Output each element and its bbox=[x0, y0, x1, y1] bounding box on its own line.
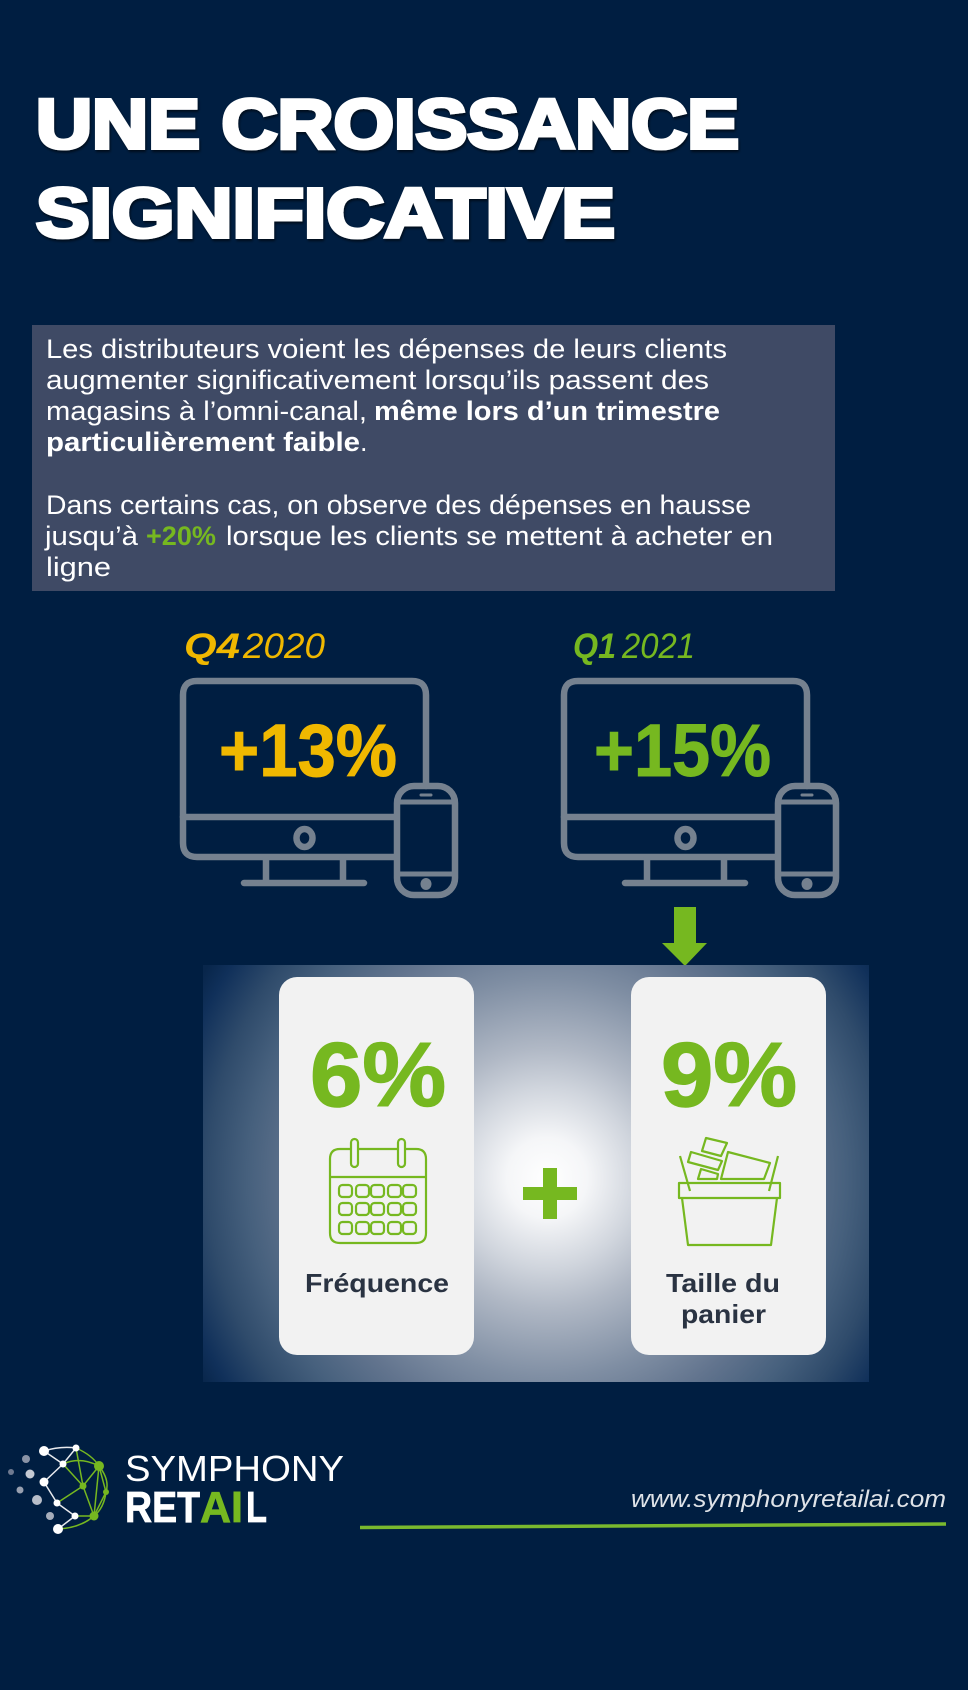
panel: intro text: même lors d’un trimestre bbox=[374, 396, 720, 426]
label: Fréquence: Fréquence bbox=[305, 1268, 449, 1298]
card: basket size bbox=[631, 977, 826, 1355]
heading: Q1 2021: 2021 bbox=[621, 627, 695, 666]
wordmark: RETAIL: L bbox=[246, 1483, 267, 1532]
wordmark: RETAIL: AI bbox=[200, 1483, 243, 1532]
footer line bbox=[360, 1524, 946, 1528]
label: Taille du panier bbox=[666, 1268, 780, 1329]
panel: intro text: ligne bbox=[46, 552, 111, 582]
heading: Q1 2021 bbox=[573, 627, 695, 666]
icon: desktop and phone, Q1 bbox=[564, 681, 836, 895]
big number: 6%: 6% bbox=[310, 1025, 446, 1126]
panel: intro text: particulièrement faible bbox=[46, 427, 360, 457]
title: UNE CROISSANCE bbox=[36, 85, 739, 163]
wordmark: SYMPHONY: SYMPHONY bbox=[125, 1448, 344, 1489]
title: SIGNIFICATIVE bbox=[36, 174, 615, 252]
heading: Q4 2020 bbox=[184, 627, 326, 666]
panel: intro text: Dans certains cas, on observe des dépenses en hausse bbox=[46, 490, 751, 520]
label: Taille du panier: Taille du bbox=[666, 1268, 780, 1298]
website url: www.symphonyretailai.com bbox=[631, 1486, 946, 1513]
panel: intro text: magasins à l’omni-canal, bbox=[46, 396, 367, 426]
card: frequency bbox=[279, 977, 474, 1355]
icon: plus sign bbox=[523, 1168, 577, 1219]
icon: calendar bbox=[330, 1139, 426, 1243]
panel: intro text: Les distributeurs voient les dépenses de leurs clients bbox=[46, 334, 727, 364]
wordmark: RETAIL bbox=[125, 1483, 267, 1532]
panel: intro text: +20% bbox=[146, 521, 216, 551]
logo: Symphony Retail bbox=[8, 1444, 344, 1534]
panel: intro text: augmenter significativement lorsqu’ils passent des bbox=[46, 365, 709, 395]
icon: shopping basket bbox=[679, 1138, 780, 1245]
heading: Q1 2021: Q1 bbox=[573, 627, 616, 666]
panel: intro text: . bbox=[360, 427, 368, 457]
panel: intro text: lorsque les clients se mettent à acheter en bbox=[226, 521, 773, 551]
big number: +13%: +13% bbox=[219, 709, 397, 792]
panel: breakdown glow background bbox=[203, 965, 869, 1382]
panel: intro text bbox=[32, 325, 835, 591]
arrow: down to breakdown bbox=[662, 907, 707, 966]
big number: 9%: 9% bbox=[661, 1025, 797, 1126]
wordmark: RETAIL: RET bbox=[125, 1483, 200, 1532]
panel: intro text: jusqu’à bbox=[44, 521, 139, 551]
title bbox=[36, 85, 739, 252]
label: Taille du panier: panier bbox=[681, 1299, 766, 1329]
icon: network globe bbox=[8, 1444, 109, 1534]
big number: +15%: +15% bbox=[594, 709, 771, 792]
heading: Q4 2020: Q4 bbox=[184, 627, 240, 666]
icon: desktop and phone, Q4 bbox=[183, 681, 455, 895]
heading: Q4 2020: 2020 bbox=[242, 627, 326, 666]
